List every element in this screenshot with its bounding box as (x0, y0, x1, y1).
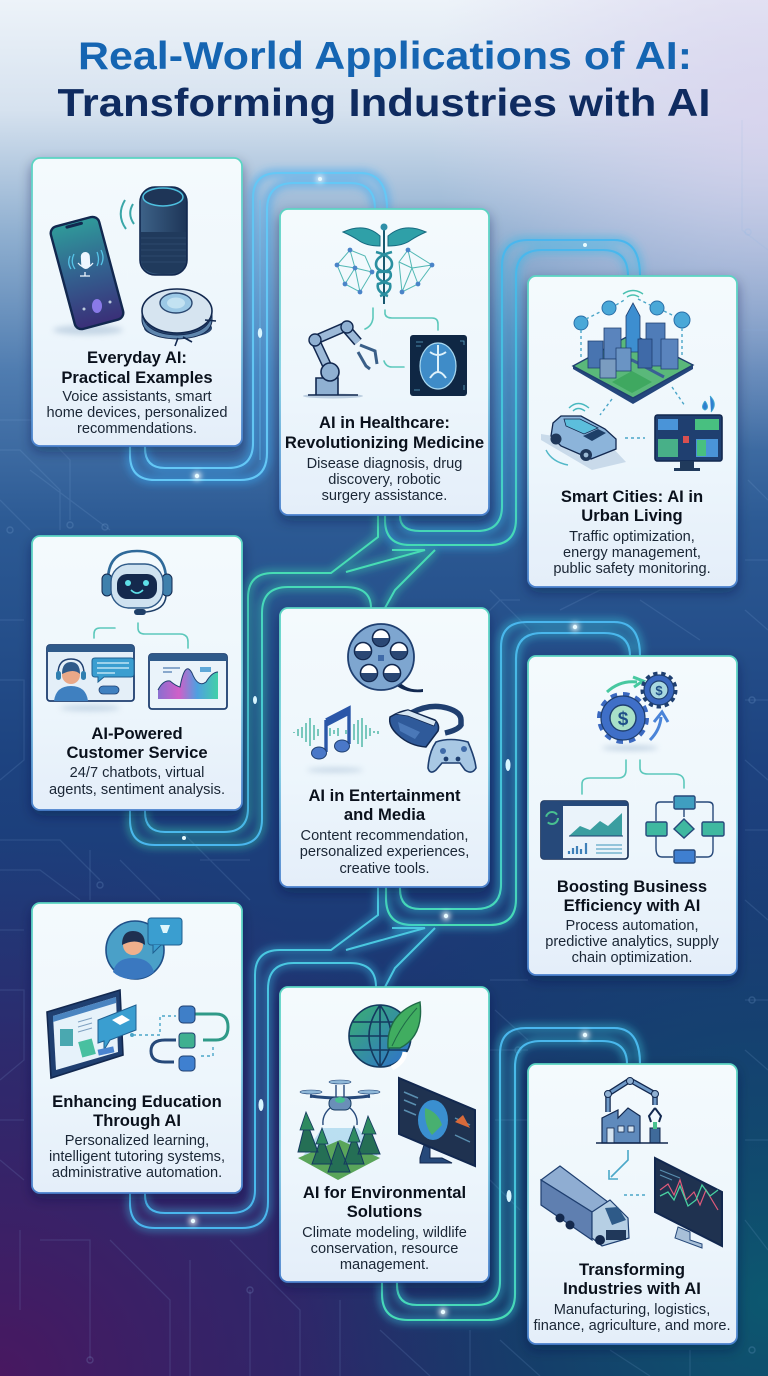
title (58, 35, 710, 125)
body text (545, 918, 719, 966)
heading: Efficiency with AI (564, 896, 700, 915)
icon: music notes with waveform (294, 708, 378, 772)
body text (533, 1302, 731, 1334)
heading (557, 877, 707, 915)
body text: 24/7 chatbots, virtual (70, 765, 204, 781)
heading: Through AI (93, 1111, 181, 1130)
body text: management. (340, 1257, 429, 1273)
body text: chain optimization. (572, 950, 692, 966)
body text: recommendations. (77, 421, 197, 437)
panel: industries (528, 1064, 737, 1344)
connector lines (365, 308, 438, 367)
icon: tutor avatar (106, 918, 182, 979)
icon: earth monitor (399, 1078, 475, 1166)
dashed link (624, 1194, 645, 1196)
body text (49, 1133, 225, 1181)
icon: gears with arrows: $ (655, 683, 663, 698)
body text: Process automation, (565, 918, 699, 934)
body text: finance, agriculture, and more. (533, 1318, 731, 1334)
heading: Transforming (579, 1260, 685, 1279)
connector: customer service to entertainment (130, 515, 435, 845)
heading: and Media (344, 805, 426, 824)
icon: caduceus with neural networks (335, 224, 434, 304)
body text: predictive analytics, supply (545, 934, 719, 950)
connector: environment to industries (382, 1028, 640, 1320)
icon: globe with leaf (349, 1002, 421, 1068)
body text (49, 765, 225, 798)
icon: isometric city (573, 290, 693, 404)
heading: AI-Powered (91, 724, 183, 743)
body text: conservation, resource (311, 1241, 458, 1257)
body text: home devices, personalized (47, 405, 227, 421)
body text: personalized experiences, (300, 844, 469, 860)
connector: everyday AI to healthcare (130, 173, 387, 480)
icon: film reel (348, 624, 423, 692)
panel: education (32, 903, 242, 1193)
body text: Manufacturing, logistics, (554, 1302, 710, 1318)
icon: tablet (47, 990, 136, 1078)
body text: Personalized learning, (65, 1133, 209, 1149)
panel: smart cities (528, 276, 737, 587)
panel: everyday AI (32, 158, 242, 446)
panel: customer service (32, 536, 242, 810)
icon: chat window with agent (47, 645, 134, 711)
heading: AI for Environmental (303, 1183, 466, 1202)
heading (561, 487, 703, 525)
heading (52, 1092, 222, 1130)
body text: Disease diagnosis, drug (307, 456, 462, 472)
icon: factory with robotic arm (596, 1078, 668, 1143)
icon: gears with arrows: $ (618, 709, 629, 730)
title line 2: Transforming Industries with AI (58, 82, 710, 125)
connector: education to environment (130, 887, 435, 1228)
panel: healthcare (280, 209, 489, 515)
panel: entertainment (280, 608, 489, 887)
heading: Boosting Business (557, 877, 707, 896)
arrow (609, 1150, 628, 1179)
body text: surgery assistance. (322, 488, 447, 504)
icon: drone over forest (298, 1080, 380, 1180)
panel: business efficiency (528, 656, 737, 975)
connector: healthcare to smart cities (385, 240, 640, 545)
body text: public safety monitoring. (553, 561, 711, 577)
body text (302, 1225, 467, 1273)
heading: Solutions (347, 1202, 422, 1221)
body text: agents, sentiment analysis. (49, 782, 225, 798)
body text (553, 529, 711, 577)
title line 1: Real-World Applications of AI: (78, 35, 692, 78)
heading (61, 348, 213, 387)
heading (303, 1183, 466, 1221)
icon: process flowchart (646, 796, 724, 863)
connector: entertainment to business (386, 622, 640, 925)
icon: traffic monitor (655, 396, 722, 471)
icon: robot head with headset (102, 551, 172, 615)
body text: discovery, robotic (328, 472, 441, 488)
heading: AI in Healthcare: (319, 413, 450, 432)
body text: creative tools. (339, 861, 430, 877)
heading (66, 724, 208, 762)
heading (285, 413, 484, 452)
icon: analytics window (149, 654, 227, 709)
connector lines (582, 760, 684, 794)
body text (307, 456, 462, 504)
heading: Urban Living (581, 506, 683, 525)
heading: Smart Cities: AI in (561, 487, 703, 506)
icon: VR headset (390, 706, 461, 747)
connector lines (94, 623, 188, 648)
body text (47, 389, 227, 437)
body text: Content recommendation, (301, 828, 468, 844)
body text: Climate modeling, wildlife (302, 1225, 467, 1241)
body text: intelligent tutoring systems, (49, 1149, 225, 1165)
heading (563, 1260, 701, 1298)
icon: robotic arm (303, 321, 377, 398)
icon: learning flow (130, 1006, 228, 1071)
icon: analytics dashboard (541, 801, 628, 859)
icon: robot vacuum (142, 289, 216, 346)
icon: finance monitor (655, 1158, 722, 1248)
heading: Industries with AI (563, 1279, 701, 1298)
heading: Customer Service (66, 743, 208, 762)
dashed links (600, 387, 685, 438)
icon: gears with arrows (601, 674, 674, 750)
icon: smartphone with voice assistant (49, 215, 125, 335)
body text: Traffic optimization, (569, 529, 695, 545)
panel: environment (280, 987, 489, 1282)
body text: Voice assistants, smart (62, 389, 212, 405)
body text: administrative automation. (52, 1165, 222, 1181)
body text: energy management, (563, 545, 701, 561)
heading: Practical Examples (61, 368, 213, 387)
heading (308, 786, 461, 824)
heading: Revolutionizing Medicine (285, 433, 484, 452)
icon: delivery truck (541, 1166, 629, 1246)
icon: connected car (541, 404, 626, 470)
icon: game controller (428, 740, 476, 772)
heading: Enhancing Education (52, 1092, 222, 1111)
heading: Everyday AI: (87, 348, 187, 367)
icon: smart speaker (121, 187, 187, 275)
body text (300, 828, 469, 877)
icon: brain scan (410, 335, 467, 396)
heading: AI in Entertainment (308, 786, 461, 805)
